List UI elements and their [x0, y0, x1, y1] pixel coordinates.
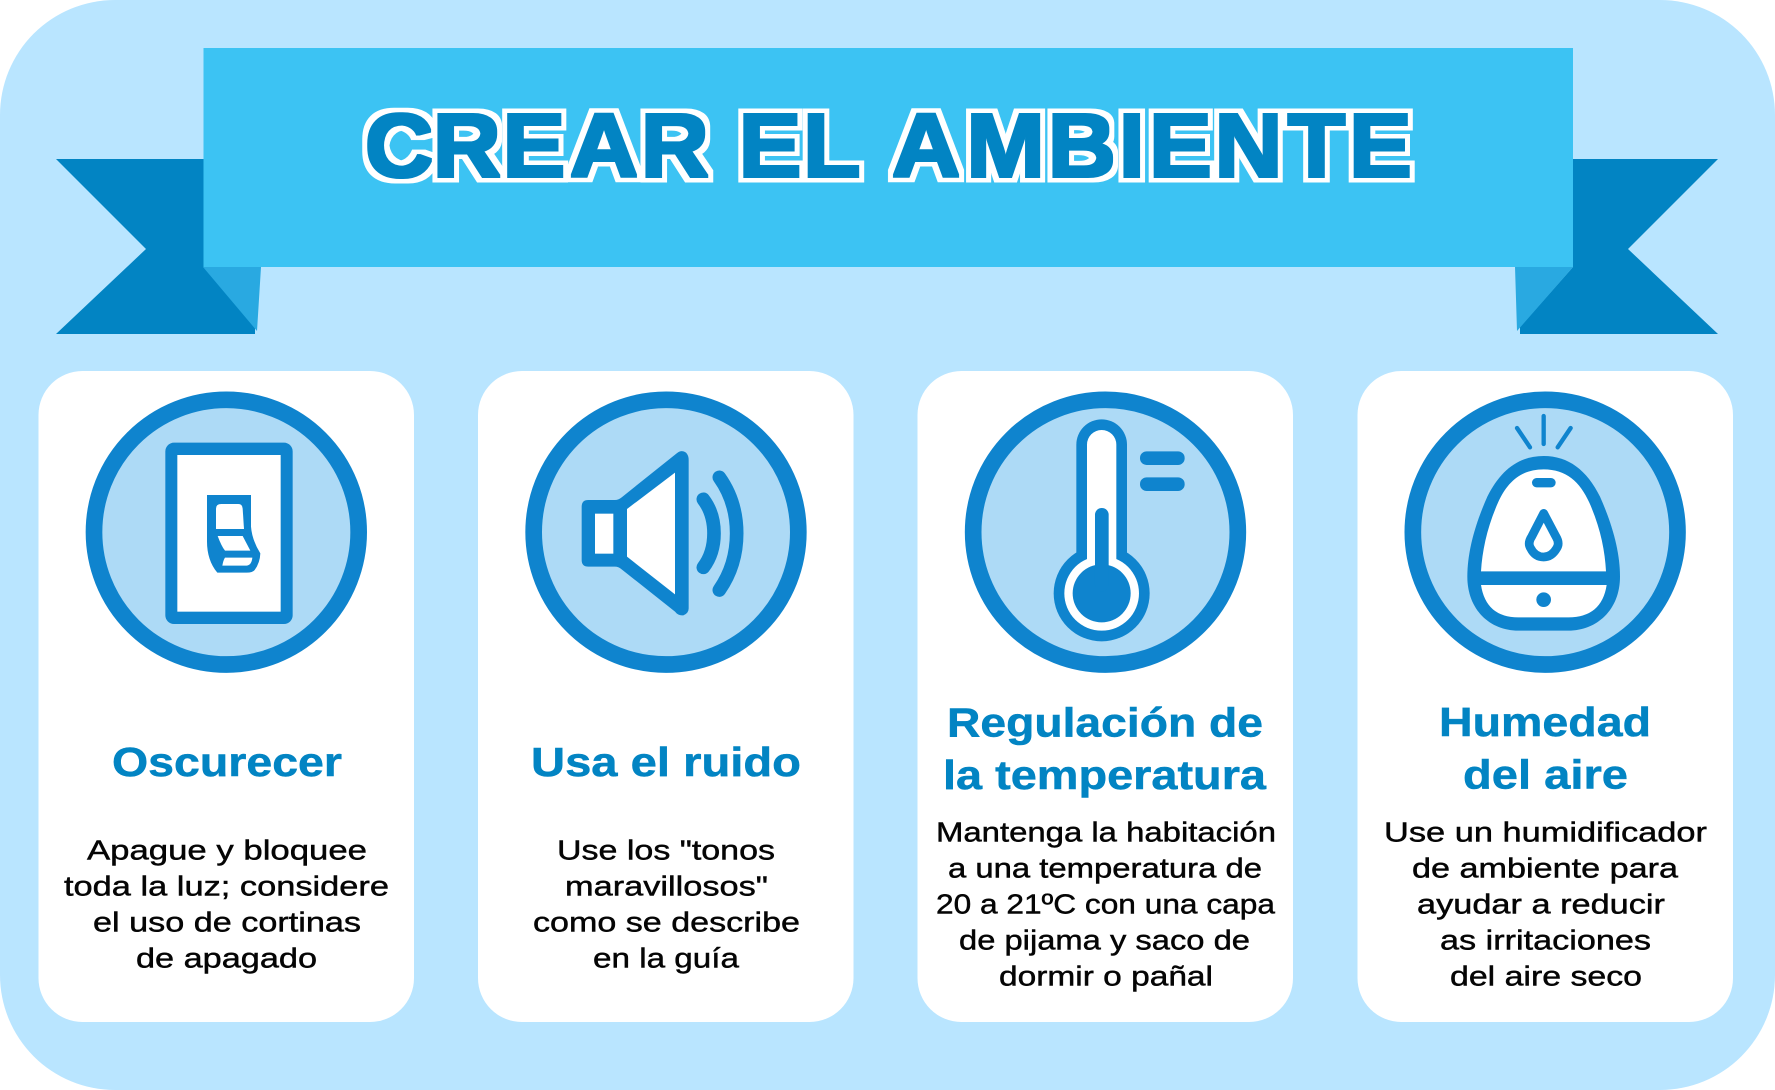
heading: Humedad: [1439, 699, 1651, 745]
panel: oscurecer: [38, 371, 414, 1022]
body text: toda la luz; considere: [64, 870, 389, 902]
body text: de pijama y saco de: [959, 924, 1250, 956]
left ribbon fold: [203, 267, 261, 331]
heading: [1439, 699, 1651, 798]
right ribbon tail: [1520, 159, 1718, 334]
body text: Mantenga la habitación: [936, 816, 1276, 848]
banner body: [204, 48, 1573, 267]
body text: Use un humidificador: [1384, 816, 1707, 848]
panel: regulacion de la temperatura: [918, 371, 1293, 1022]
heading: del aire: [1463, 752, 1628, 798]
body text: a una temperatura de: [948, 852, 1262, 884]
panel: humedad del aire: [1358, 371, 1733, 1022]
body text: ayudar a reducir: [1417, 888, 1665, 920]
card background: [1358, 371, 1733, 1022]
body text: maravillosos": [565, 870, 768, 902]
heading: Oscurecer: [112, 739, 342, 785]
title: CREAR EL AMBIENTE: [365, 95, 1412, 196]
icon: speaker: [534, 400, 798, 664]
body text: del aire seco: [1450, 960, 1642, 992]
left ribbon tail: [56, 159, 255, 334]
body text: [533, 834, 800, 974]
heading: la temperatura: [943, 752, 1267, 798]
body text: dormir o pañal: [999, 960, 1213, 992]
body text: [936, 816, 1276, 992]
card background: [38, 371, 414, 1022]
icon: light switch: [94, 400, 359, 664]
body text: como se describe: [533, 906, 800, 938]
panel: usa el ruido: [478, 371, 854, 1022]
right ribbon fold: [1515, 267, 1573, 331]
card background: [918, 371, 1293, 1022]
body text: [64, 834, 389, 974]
body text: de ambiente para: [1412, 852, 1679, 884]
icon: humidifier: [1413, 400, 1677, 664]
body text: as irritaciones: [1440, 924, 1651, 956]
heading: Usa el ruido: [531, 739, 801, 785]
body text: Apague y bloquee: [87, 834, 367, 866]
heading: Regulación de: [947, 700, 1263, 746]
title banner ribbon: [56, 48, 1718, 334]
body text: Use los "tonos: [557, 834, 775, 866]
body text: de apagado: [136, 942, 317, 974]
heading: [943, 700, 1267, 798]
card background: [478, 371, 854, 1022]
body text: 20 a 21ºC con una capa: [936, 888, 1275, 920]
body text: en la guía: [593, 942, 739, 974]
icon: thermometer: [973, 400, 1238, 664]
body text: [1384, 816, 1707, 992]
body text: el uso de cortinas: [93, 906, 361, 938]
